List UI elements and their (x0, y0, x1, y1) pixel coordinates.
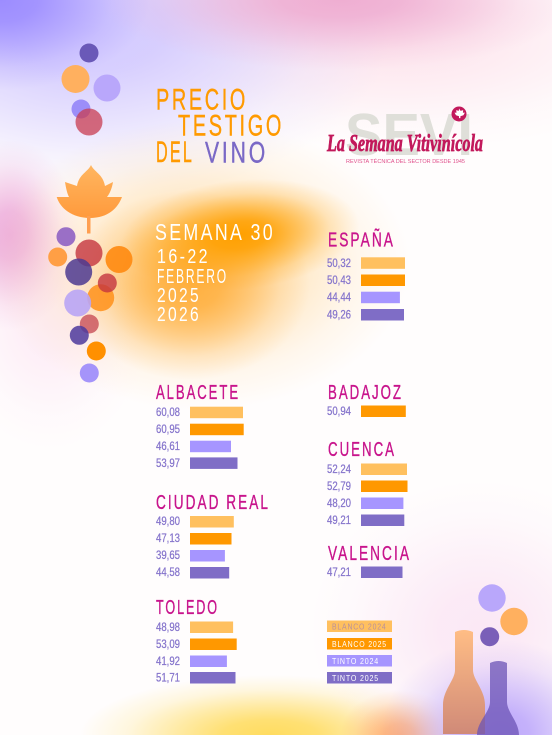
panel: Albacete: 60,95 (156, 424, 180, 436)
legend: BLANCO 2025 (332, 639, 387, 649)
icon: top grape circles (62, 44, 120, 136)
date block: 16-22 (157, 246, 210, 268)
panel: Cuenca: 48,20 (327, 498, 351, 510)
panel: Toledo (156, 597, 237, 684)
panel: España: ESPAÑA (328, 228, 395, 252)
title: DEL (156, 136, 194, 169)
icon: bottle circles (478, 584, 528, 646)
panel: España: 49,26 (327, 310, 351, 322)
panel: Albacete (156, 382, 244, 470)
panel: España: 44,44 (327, 292, 352, 304)
panel: Cuenca: CUENCA (328, 439, 396, 461)
icon: vine leaf (57, 165, 122, 234)
panel: Badajoz: BADAJOZ (328, 382, 403, 404)
legend: BLANCO 2024 (332, 622, 386, 632)
date block: 2025 (157, 285, 201, 307)
panel: Cuenca: 52,79 (327, 481, 351, 493)
legend (327, 620, 392, 684)
panel: Valencia (327, 543, 411, 579)
title: TESTIGO (178, 110, 284, 142)
panel: Badajoz (327, 382, 406, 418)
panel: Badajoz: 50,94 (327, 406, 352, 418)
date block (155, 219, 275, 326)
panel: Toledo: 51,71 (156, 672, 180, 684)
panel: Valencia: VALENCIA (328, 543, 411, 565)
title: PRECIO (156, 84, 248, 116)
logo: La Semana Vitivinícola: SEVI (345, 102, 473, 168)
panel: Cuenca: 49,21 (327, 515, 351, 527)
icon: wine bottles (443, 630, 519, 735)
panel: Toledo: 41,92 (156, 656, 180, 668)
panel: Cuenca: 52,24 (327, 464, 352, 476)
icon: grape bunch (48, 227, 133, 382)
title (156, 84, 284, 170)
title: VINO (205, 136, 268, 170)
panel: Cuenca (327, 439, 408, 527)
panel: Toledo: 48,98 (156, 622, 180, 634)
legend: TINTO 2025 (332, 673, 379, 683)
legend: TINTO 2024 (332, 656, 379, 666)
panel: Albacete: 60,08 (156, 407, 180, 419)
panel: Toledo: TOLEDO (156, 597, 219, 619)
panel: Valencia: 47,21 (327, 567, 351, 579)
panel: Ciudad Real: 44,58 (156, 567, 180, 579)
panel: Ciudad Real (156, 492, 270, 579)
date block: SEMANA 30 (155, 219, 275, 245)
panel: Albacete: 53,97 (156, 458, 180, 470)
panel: Albacete: 46,61 (156, 441, 180, 453)
logo: La Semana Vitivinícola: REVISTA TÉCNICA DEL SECTOR DESDE 1945 (346, 158, 465, 165)
panel: España: 50,32 (327, 258, 351, 270)
panel: Albacete: ALBACETE (156, 382, 240, 404)
panel: Ciudad Real: CIUDAD REAL (156, 492, 270, 514)
panel: España: 50,43 (327, 275, 351, 287)
panel: España (327, 228, 405, 322)
panel: Ciudad Real: 47,13 (156, 533, 180, 545)
date block: FEBRERO (157, 266, 228, 288)
panel: Ciudad Real: 39,65 (156, 550, 180, 562)
panel: Toledo: 53,09 (156, 639, 180, 651)
date block: 2026 (157, 304, 201, 326)
panel: Ciudad Real: 49,80 (156, 516, 180, 528)
